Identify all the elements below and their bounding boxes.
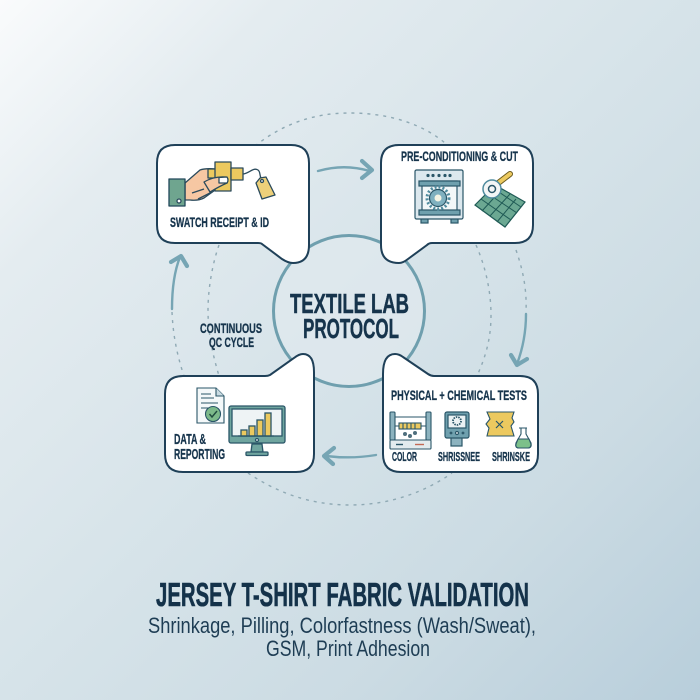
label: data and reporting (174, 432, 225, 463)
panel: data and reporting (165, 354, 314, 472)
label: shrinske: SHRINSKE (492, 449, 530, 464)
label: color: COLOR (392, 449, 417, 464)
label: shrissnee: SHRISSNEE (438, 449, 480, 464)
dashed cycle rings (172, 113, 526, 505)
icon: hand passing swatch to tag (169, 162, 275, 206)
panel: pre-conditioning and cut (381, 145, 533, 263)
subtitle: GSM, Print Adhesion (266, 636, 430, 661)
label: pre-conditioning: PRE-CONDITIONING & CUT (401, 148, 518, 164)
label: continuous QC cycle: QC CYCLE (209, 334, 254, 350)
label: data and reporting: DATA & (174, 432, 206, 448)
icon: rotary cutter on green mat (475, 174, 525, 227)
label: swatch receipt: SWATCH RECEIPT & ID (170, 214, 269, 230)
subtitle: Shrinkage, Pilling, Colorfastness (Wash/Sweat), (148, 613, 536, 638)
panel: swatch receipt and ID (157, 145, 309, 263)
subtitle (148, 613, 536, 661)
icon: conditioning oven with gear (415, 170, 463, 223)
arrow: pre-conditioning to physical tests (511, 314, 527, 365)
icon: handheld gauge (445, 412, 469, 446)
center circle: textile lab protocol: PROTOCOL (303, 313, 399, 344)
label: continuous QC cycle: CONTINUOUS (200, 320, 262, 336)
icon: yellow sample and flask (486, 412, 531, 448)
arrow: physical tests to data reporting (324, 448, 376, 464)
arrow: data reporting to swatch receipt (171, 256, 187, 309)
panel: physical and chemical tests (383, 354, 538, 472)
icon: monitor with bar chart (229, 406, 285, 456)
arrow: swatch receipt to pre-conditioning (318, 161, 372, 178)
center circle: textile lab protocol: TEXTILE LAB (290, 288, 409, 319)
label: continuous QC cycle (200, 320, 262, 350)
icon: crockmeter color tester (390, 412, 431, 449)
label: data and reporting: REPORTING (174, 447, 225, 463)
center circle: textile lab protocol (274, 236, 424, 386)
label: physical and chemical tests: PHYSICAL + CHEMICAL TESTS (391, 387, 527, 403)
icon: report with check badge (197, 388, 224, 423)
